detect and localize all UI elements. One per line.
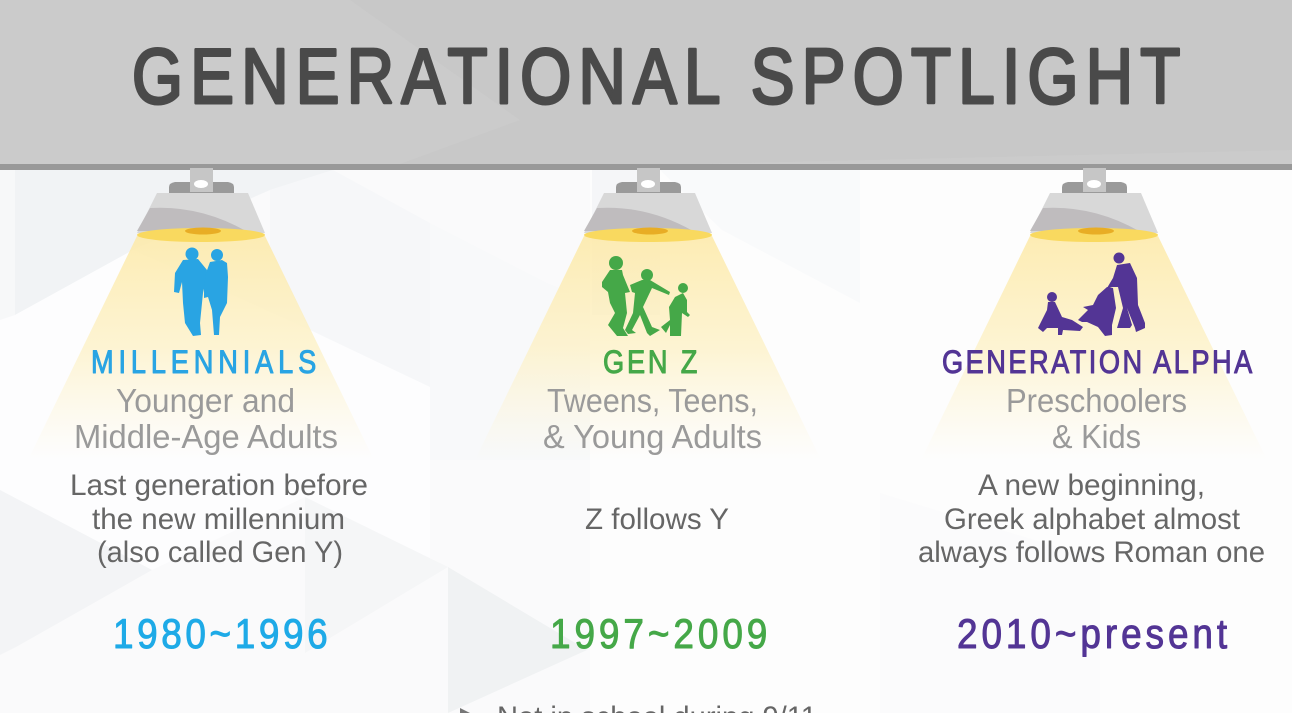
panel: gen z [475,168,821,658]
description: always follows Roman one [918,536,1265,569]
icon: three children walking [602,256,690,336]
description: the new millennium [92,503,345,536]
description: Last generation before [70,469,368,502]
heading: generation alpha: GENERATION ALPHA [942,345,1252,381]
icon: spotlight lamp [475,168,821,460]
description: Z follows Y [585,503,729,536]
audience: Tweens, Teens, [547,382,758,419]
icon: parent with stroller and toddler on trike [1038,252,1145,336]
audience [74,382,338,455]
description: (also called Gen Y) [97,536,343,569]
heading: millennials: MILLENNIALS [91,345,316,381]
heading: gen z: GEN Z [603,345,697,381]
audience: Middle-Age Adults [74,418,338,455]
description: Greek alphabet almost [944,503,1241,536]
icon: couple walking [174,248,228,336]
audience: & Young Adults [543,418,762,455]
icon: spotlight lamp [28,168,374,460]
description [918,469,1265,569]
audience [1006,382,1187,455]
description [70,469,368,569]
audience: & Kids [1052,418,1141,455]
title: GENERATIONAL SPOTLIGHT [132,34,1180,120]
panel: millennials [28,168,374,658]
years: 2010~present [957,611,1227,658]
audience: Preschoolers [1006,382,1187,419]
years: 1980~1996 [113,611,328,658]
header band [0,0,1292,170]
icon: bullet arrow [460,708,470,713]
audience [543,382,762,455]
description: A new beginning, [978,469,1205,502]
years: 1997~2009 [550,611,767,658]
audience: Younger and [116,382,295,419]
icon: spotlight lamp [921,168,1267,460]
panel: generation alpha [918,168,1267,658]
